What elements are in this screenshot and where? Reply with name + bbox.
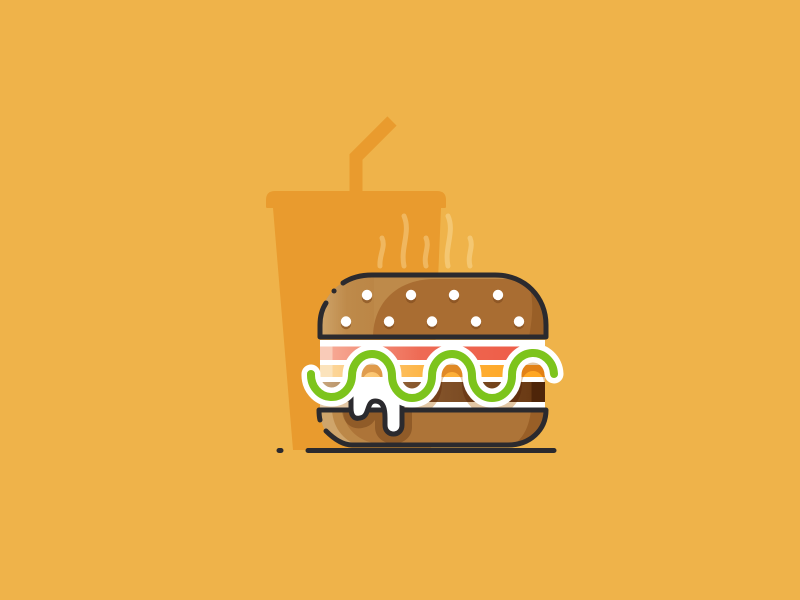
cup body [273,208,441,450]
patty [320,382,545,402]
drink cup silhouette [266,121,446,450]
cup lid [266,191,446,208]
drip shadow [352,396,402,434]
steam [380,216,471,266]
ground line [279,448,554,453]
bottom bun [320,410,546,446]
tomato [320,346,545,360]
top bun outline [320,275,546,337]
top bun [320,275,560,337]
bottom bun shading [332,412,544,442]
lettuce squiggle [311,353,554,398]
melted cheese drip [351,377,402,434]
filling layers [320,340,545,408]
bottom bun outline [319,410,546,445]
straw [356,121,392,195]
cheese [320,365,545,377]
sesame seeds [341,290,524,329]
lettuce shadow [311,361,554,406]
burger and drink illustration [266,116,564,453]
